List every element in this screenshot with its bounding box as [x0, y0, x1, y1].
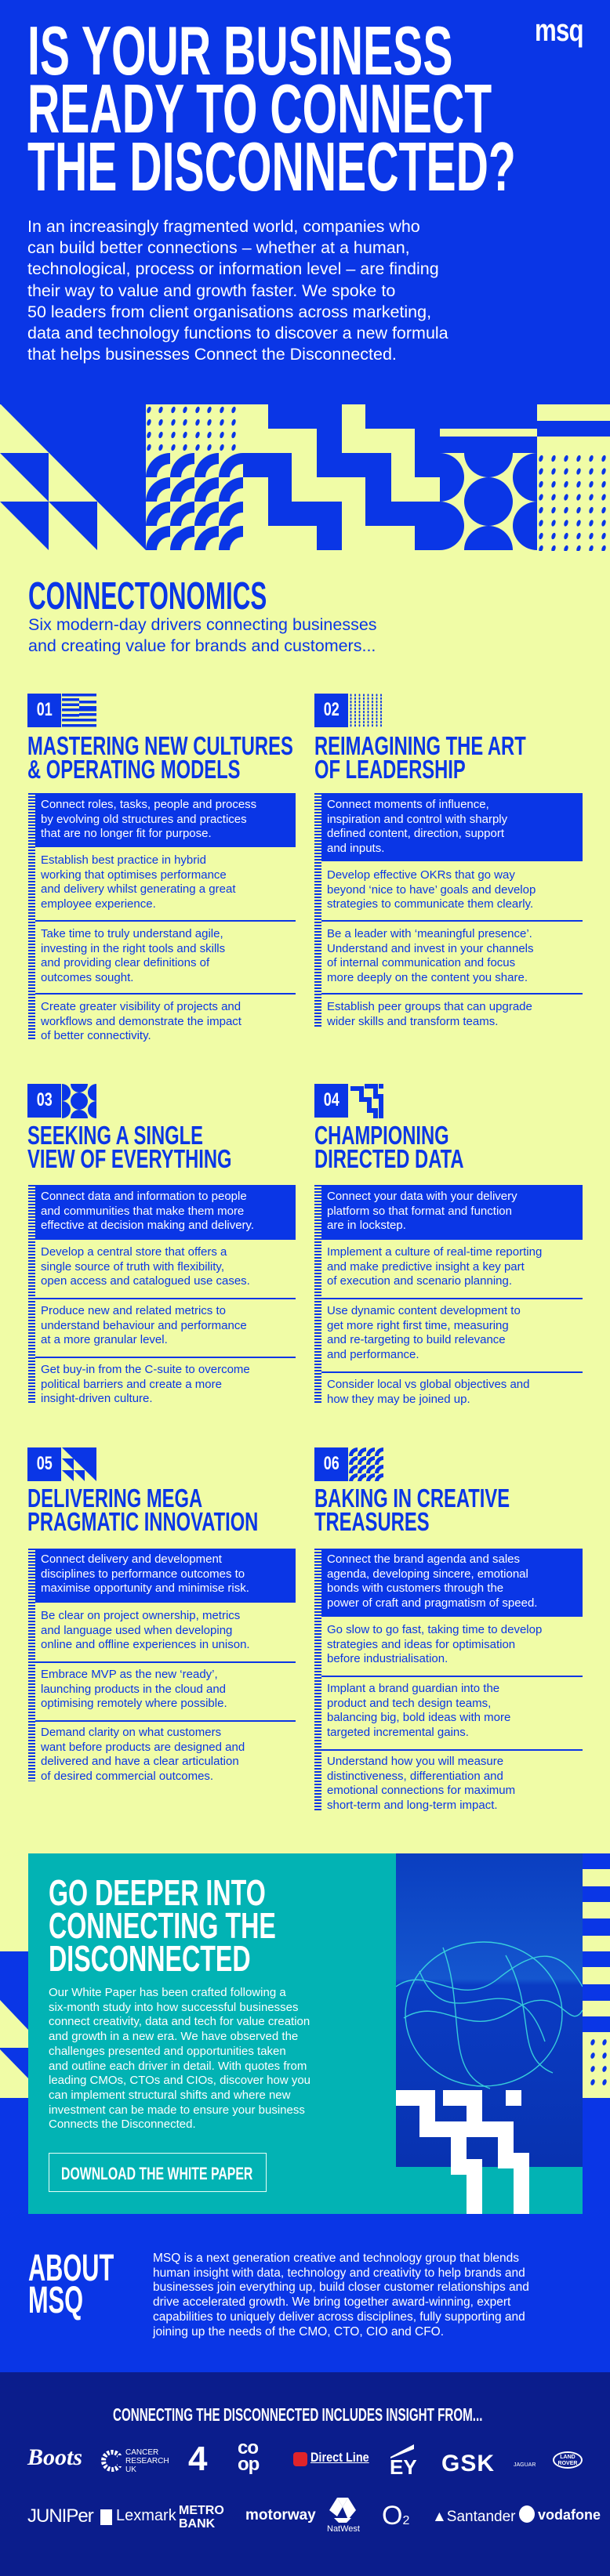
heading 05	[27, 1484, 258, 1536]
04 point 2: Implement a culture of real-time reporting	[327, 1245, 542, 1259]
panel: 06 creative treasures	[314, 1447, 510, 1536]
01 point 3	[41, 927, 225, 984]
photo: glowing connections	[396, 1853, 583, 2214]
heading 06: BAKING IN CREATIVE	[314, 1484, 510, 1513]
03 point 2: open access and catalogued use cases.	[41, 1274, 250, 1288]
white paper description: challenges presented and opportunities taken	[49, 2045, 286, 2058]
02 point 3: Understand and invest in your channels	[327, 942, 533, 955]
intro paragraph: their way to value and growth faster. We spoke to	[27, 281, 395, 300]
06 highlighted point	[327, 1552, 537, 1610]
intro paragraph: In an increasingly fragmented world, companies who	[27, 217, 420, 236]
04 point 3	[327, 1304, 521, 1361]
heading 01: MASTERING NEW CULTURES	[27, 731, 293, 760]
06 point 3: targeted incremental gains.	[327, 1726, 469, 1739]
title: IS YOUR BUSINESS	[27, 12, 452, 89]
subheading	[28, 615, 377, 655]
badge 02: 02	[324, 699, 339, 720]
02 point 4: wider skills and transform teams.	[327, 1015, 498, 1028]
logo row 2: JUNIPer	[27, 2505, 93, 2527]
06 point 3: Implant a brand guardian into the	[327, 1682, 499, 1695]
05 highlighted point: disciplines to performance outcomes to	[41, 1567, 245, 1581]
intro paragraph: can build better connections – whether at a human,	[27, 238, 410, 257]
06 point 4: short-term and long-term impact.	[327, 1799, 498, 1812]
logo row 2: NatWest	[327, 2524, 360, 2534]
badge 02	[314, 694, 382, 727]
heading 04	[314, 1121, 464, 1173]
03 point 4: insight-driven culture.	[41, 1392, 153, 1405]
badge 03	[27, 1084, 96, 1118]
05 point 2	[41, 1609, 250, 1651]
01 highlighted point: Connect roles, tasks, people and process	[41, 798, 256, 811]
logo row 2	[0, 2498, 610, 2556]
04 highlighted point: are in lockstep.	[327, 1219, 406, 1232]
05 highlighted point	[41, 1552, 249, 1595]
05 point 3: optimising remotely where possible.	[41, 1697, 227, 1710]
03 highlighted point: and communities that make them more	[41, 1205, 244, 1218]
logo row 2: vodafone	[538, 2507, 601, 2523]
intro paragraph: technological, process or information level – are finding	[27, 259, 439, 278]
intro paragraph: data and technology functions to discover a new formula	[27, 324, 448, 342]
panel: 02 reimagining leadership	[314, 694, 526, 784]
03 point 3: at a more granular level.	[41, 1333, 168, 1346]
03 point 3	[41, 1304, 247, 1346]
badge 01	[27, 694, 96, 727]
01 point 2: working that optimises performance	[41, 868, 227, 882]
04 point 4: Consider local vs global objectives and	[327, 1378, 529, 1391]
white paper description: connect creativity, data and tech for value creation	[49, 2015, 310, 2028]
02 point 2: Develop effective OKRs that go way	[327, 868, 515, 882]
05 point 4: delivered and have a clear articulation	[41, 1755, 239, 1768]
logo row 2: O2	[382, 2501, 409, 2531]
06 point 3	[327, 1682, 510, 1741]
about text: joining up the needs of the CMO, CTO, CIO and CFO.	[153, 2325, 444, 2339]
03 point 2	[41, 1245, 250, 1288]
04 point 4: how they may be joined up.	[327, 1393, 470, 1406]
badge 04: 04	[324, 1089, 339, 1110]
panel: 05 pragmatic innovation	[27, 1447, 258, 1536]
04 point 4	[327, 1378, 529, 1406]
03 point 3: understand behaviour and performance	[41, 1319, 247, 1332]
logo row 2: METRO	[179, 2504, 224, 2517]
logo row 1: RESEARCH	[125, 2457, 169, 2465]
heading 02: REIMAGINING THE ART	[314, 731, 526, 760]
05 point 2: and language used when developing	[41, 1624, 232, 1637]
subheading: and creating value for brands and customers...	[28, 636, 376, 655]
heading 03: SEEKING A SINGLE	[27, 1121, 203, 1150]
logo row 1: EY	[390, 2455, 417, 2479]
geometric pattern band	[0, 404, 610, 551]
heading: connectonomics: CONNECTONOMICS	[28, 575, 267, 618]
heading 05: DELIVERING MEGA	[27, 1484, 202, 1513]
02 point 4: Establish peer groups that can upgrade	[327, 1000, 532, 1013]
white paper description: six-month study into how successful businesses	[49, 2001, 298, 2014]
02 highlighted point: Connect moments of influence,	[327, 798, 489, 811]
about text: businesses join everything up, build closer customer relationships and	[153, 2281, 529, 2294]
02 point 3: more deeply on the content you share.	[327, 971, 528, 984]
01 highlighted point	[41, 798, 256, 840]
02 point 4	[327, 1000, 532, 1028]
badge 01: 01	[37, 699, 53, 720]
heading 03: VIEW OF EVERYTHING	[27, 1144, 232, 1173]
panel: go deeper (white paper)	[28, 1853, 583, 2214]
06 point 3: product and tech design teams,	[327, 1697, 491, 1710]
logo row 1: GSK	[441, 2451, 495, 2476]
02 point 2: strategies to communicate them clearly.	[327, 897, 533, 911]
logo row 1: LAND	[560, 2455, 576, 2460]
heading: go deeper	[49, 1876, 276, 1975]
title: READY TO CONNECT	[27, 70, 492, 147]
05 point 4: want before products are designed and	[41, 1741, 245, 1754]
02 highlighted point: defined content, direction, support	[327, 827, 504, 840]
06 point 4: distinctiveness, differentiation and	[327, 1770, 503, 1783]
badge 03: 03	[37, 1089, 53, 1110]
logo row 1: op	[238, 2454, 259, 2475]
heading: about msq: MSQ	[28, 2280, 83, 2321]
01 highlighted point: by evolving old structures and practices	[41, 813, 247, 826]
white paper description: Connects the Disconnected.	[49, 2118, 196, 2131]
06 point 4	[327, 1755, 515, 1813]
logo row 2: ▲Santander	[432, 2509, 516, 2525]
04 point 3: and performance.	[327, 1348, 419, 1361]
01 point 3: investing in the right tools and skills	[41, 942, 225, 955]
panel: 04 directed data	[314, 1084, 464, 1173]
lower blue background	[0, 1951, 610, 2375]
white paper description: leading CMOs, CTOs and CIOs, discover how you	[49, 2074, 310, 2087]
white paper description	[49, 1986, 310, 2132]
about text: human insight with data, technology and creativity to help brands and	[153, 2266, 525, 2280]
02 highlighted point	[327, 798, 508, 855]
06 highlighted point: bonds with customers through the	[327, 1581, 503, 1595]
badge 06	[314, 1447, 383, 1481]
heading 01: & OPERATING MODELS	[27, 755, 240, 784]
heading: go deeper: DISCONNECTED	[49, 1938, 251, 1979]
header background	[0, 0, 610, 404]
01 point 4: workflows and demonstrate the impact	[41, 1015, 241, 1028]
clients heading: CONNECTING THE DISCONNECTED INCLUDES INSIGHT FROM...	[113, 2404, 482, 2425]
panel: 03 single view	[27, 1084, 232, 1173]
side decorations	[0, 1853, 610, 2104]
03 point 4	[41, 1363, 250, 1405]
heading: go deeper: GO DEEPER INTO	[49, 1872, 266, 1913]
white paper description: can implement structural shifts and where new	[49, 2089, 290, 2102]
01 point 4	[41, 1000, 241, 1042]
intro paragraph: 50 leaders from client organisations across marketing,	[27, 303, 431, 321]
04 highlighted point: Connect your data with your delivery	[327, 1190, 517, 1203]
04 highlighted point	[327, 1190, 517, 1232]
logo row 1: 4	[188, 2440, 207, 2478]
04 point 3: and re-targeting to build relevance	[327, 1333, 506, 1346]
heading 02	[314, 731, 526, 784]
logo row 1: CANCER	[125, 2448, 158, 2457]
01 point 3: outcomes sought.	[41, 971, 133, 984]
05 highlighted point: maximise opportunity and minimise risk.	[41, 1581, 249, 1595]
intro paragraph: that helps businesses Connect the Disconnected.	[27, 345, 397, 364]
01 point 2: employee experience.	[41, 897, 156, 911]
logo row 2: Lexmark	[116, 2507, 176, 2524]
heading 05: PRAGMATIC INNOVATION	[27, 1507, 258, 1536]
panel: 01 mastering new cultures	[27, 694, 293, 784]
02 point 2: beyond ‘nice to have’ goals and develop	[327, 883, 536, 897]
badge 05: 05	[37, 1453, 53, 1474]
02 highlighted point: and inputs.	[327, 842, 384, 855]
05 point 3: Embrace MVP as the new ‘ready’,	[41, 1668, 218, 1681]
subheading: Six modern-day drivers connecting businesses	[28, 615, 377, 634]
heading 04: DIRECTED DATA	[314, 1144, 464, 1173]
logo row 1: ROVER	[558, 2461, 577, 2466]
about text	[153, 2252, 529, 2339]
heading 03	[27, 1121, 232, 1173]
05 point 3	[41, 1668, 227, 1710]
about text: drive accelerated growth. We bring together award-winning, expert	[153, 2295, 510, 2309]
06 point 2	[327, 1623, 542, 1667]
heading 04: CHAMPIONING	[314, 1121, 449, 1150]
03 point 2: single source of truth with flexibility,	[41, 1260, 224, 1274]
04 point 3: get more right first time, measuring	[327, 1319, 509, 1332]
heading: about msq: ABOUT	[28, 2248, 114, 2289]
heading 06	[314, 1484, 510, 1536]
06 point 3: balancing big, bold ideas with more	[327, 1711, 510, 1724]
02 point 3	[327, 927, 533, 984]
heading 06: TREASURES	[314, 1507, 430, 1536]
heading 02: OF LEADERSHIP	[314, 755, 466, 784]
logo row 1: JAGUAR	[514, 2462, 536, 2468]
logo row 2: motorway	[245, 2507, 316, 2523]
button: download	[49, 2153, 267, 2192]
title: THE DISCONNECTED?	[27, 128, 516, 205]
03 highlighted point: Connect data and information to people	[41, 1190, 247, 1203]
03 point 4: political barriers and create a more	[41, 1378, 222, 1391]
logo row 2: BANK	[179, 2517, 215, 2531]
01 highlighted point: that are no longer fit for purpose.	[41, 827, 212, 840]
logo: msq: msq	[535, 13, 583, 48]
05 point 4	[41, 1726, 245, 1783]
badge 06: 06	[324, 1453, 339, 1474]
01 point 2: Establish best practice in hybrid	[41, 853, 206, 867]
logo row 1: co	[238, 2437, 258, 2458]
logo row 1: UK	[125, 2465, 136, 2474]
06 highlighted point: power of craft and pragmatism of speed.	[327, 1596, 537, 1610]
06 point 2: Go slow to go fast, taking time to develop	[327, 1623, 542, 1636]
01 point 4: of better connectivity.	[41, 1029, 151, 1042]
04 highlighted point: platform so that format and function	[327, 1205, 512, 1218]
03 highlighted point: effective at decision making and delivery.	[41, 1219, 254, 1232]
white paper description: and growth in a new era. We have observed the	[49, 2030, 298, 2043]
06 point 4: emotional connections for maximum	[327, 1784, 515, 1797]
heading 01	[27, 731, 293, 784]
03 highlighted point	[41, 1190, 254, 1232]
logo row 1: Direct Line	[310, 2450, 369, 2465]
06 point 4: Understand how you will measure	[327, 1755, 503, 1768]
button: download: DOWNLOAD THE WHITE PAPER	[61, 2164, 252, 2183]
white paper description: investment can be made to ensure your business	[49, 2103, 305, 2117]
05 point 2: online and offline experiences in unison.	[41, 1638, 250, 1651]
04 point 2	[327, 1245, 542, 1288]
06 point 2: strategies and ideas for optimisation	[327, 1638, 515, 1651]
white paper description: Our White Paper has been crafted following a	[49, 1986, 286, 1999]
06 highlighted point: agenda, developing sincere, emotional	[327, 1567, 528, 1581]
04 point 2: and make predictive insight a key part	[327, 1260, 525, 1274]
04 point 2: of execution and scenario planning.	[327, 1274, 512, 1288]
clients footer	[0, 2372, 610, 2576]
02 point 3: of internal communication and focus	[327, 956, 515, 969]
logo row 1: Boots	[27, 2444, 82, 2470]
about text: capabilities to uniquely deliver across disciplines, fully supporting and	[153, 2310, 525, 2324]
06 point 2: before industrialisation.	[327, 1652, 448, 1665]
logo row 1	[0, 2435, 610, 2490]
03 point 3: Produce new and related metrics to	[41, 1304, 226, 1317]
01 point 3: and providing clear definitions of	[41, 956, 209, 969]
badge 04	[314, 1084, 383, 1118]
03 point 4: Get buy-in from the C-suite to overcome	[41, 1363, 250, 1376]
03 point 2: Develop a central store that offers a	[41, 1245, 227, 1259]
05 highlighted point: Connect delivery and development	[41, 1552, 222, 1566]
heading: about msq	[28, 2252, 114, 2317]
05 point 3: launching products in the cloud and	[41, 1683, 226, 1696]
02 point 2	[327, 868, 536, 911]
06 highlighted point: Connect the brand agenda and sales	[327, 1552, 520, 1566]
01 point 2	[41, 853, 235, 911]
title	[27, 12, 516, 205]
badge 05	[27, 1447, 96, 1481]
02 highlighted point: inspiration and control with sharply	[327, 813, 507, 826]
04 point 3: Use dynamic content development to	[327, 1304, 521, 1317]
02 point 3: Be a leader with ‘meaningful presence’.	[327, 927, 532, 940]
intro paragraph	[27, 217, 448, 364]
05 point 2: Be clear on project ownership, metrics	[41, 1609, 240, 1622]
05 point 4: of desired commercial outcomes.	[41, 1770, 213, 1783]
heading: go deeper: CONNECTING THE	[49, 1905, 276, 1946]
01 point 4: Create greater visibility of projects and	[41, 1000, 241, 1013]
white paper description: and outline each driver in detail. With quotes from	[49, 2060, 307, 2073]
about text: MSQ is a next generation creative and technology group that blends	[153, 2252, 519, 2265]
05 point 4: Demand clarity on what customers	[41, 1726, 221, 1739]
01 point 3: Take time to truly understand agile,	[41, 927, 223, 940]
01 point 2: and delivery whilst generating a great	[41, 882, 235, 896]
